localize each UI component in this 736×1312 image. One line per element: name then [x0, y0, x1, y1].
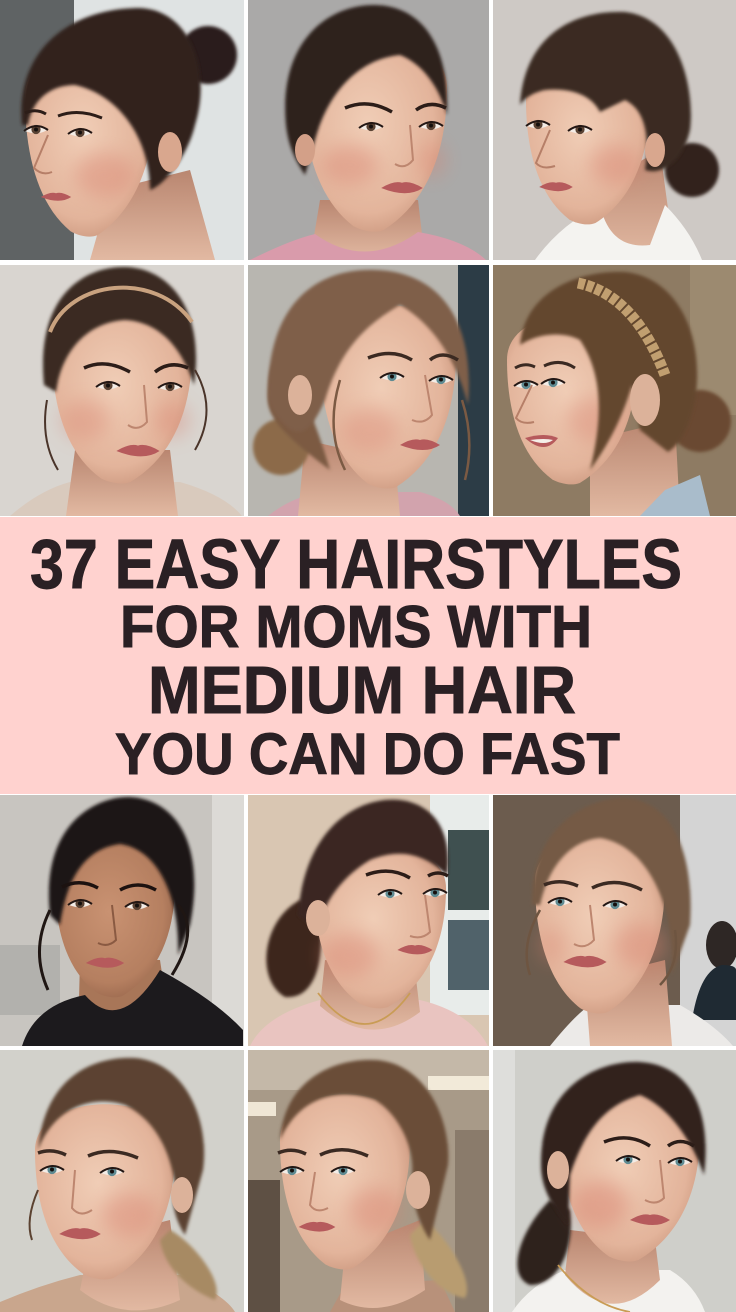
photo: brunette side ponytail	[248, 795, 489, 1046]
photo: low updo, front view	[248, 0, 489, 260]
title banner	[0, 517, 736, 794]
title line 3: MEDIUM HAIR	[148, 653, 576, 728]
photo: light brown low bun	[248, 265, 489, 516]
photo: headband updo	[0, 265, 244, 516]
photo: loose updo with salon background	[493, 795, 736, 1046]
title line 2: FOR MOMS WITH	[120, 594, 592, 660]
photo: messy bun, side view	[0, 0, 244, 260]
photo: side fringe with low bun	[493, 0, 736, 260]
title line 4: YOU CAN DO FAST	[115, 722, 620, 787]
photo: dark curly updo, black blazer	[0, 795, 244, 1046]
photo: low ponytail, side part	[0, 1050, 244, 1312]
photo: braided headband with bun	[493, 265, 736, 516]
photo: blonde-tipped ponytail, salon background	[248, 1050, 489, 1312]
photo: dark side-parted low ponytail	[493, 1050, 736, 1312]
